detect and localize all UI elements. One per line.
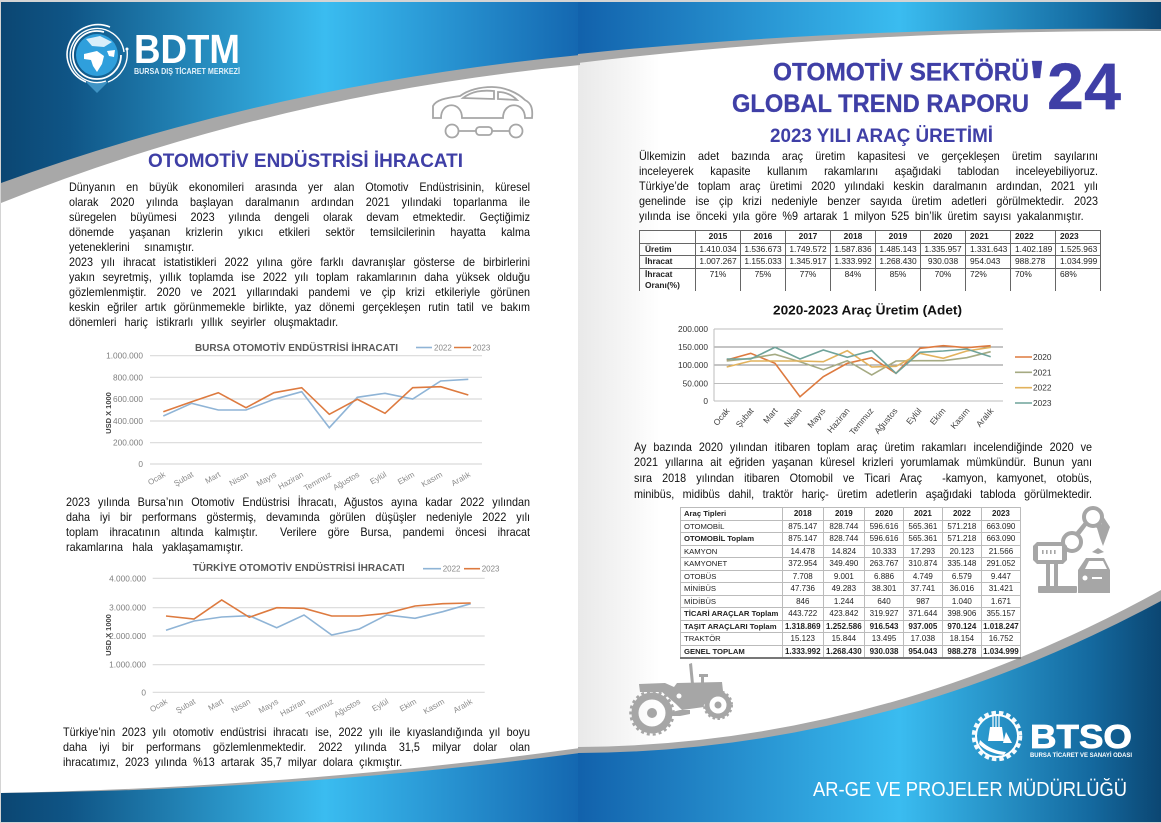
series 2021 bbox=[727, 352, 991, 375]
table: production and exports 2015-2023: 1.525.963 bbox=[1060, 244, 1097, 254]
table: production and exports 2015-2023: 70% bbox=[935, 268, 951, 278]
x axis labels: Ekim bbox=[398, 697, 418, 714]
chart legend: 2022 bbox=[434, 344, 452, 352]
table: vehicle types 2018-2023: 49.283 bbox=[832, 584, 856, 593]
x axis labels: Mart bbox=[761, 405, 780, 425]
table: vehicle types 2018-2023: GENEL TOPLAM bbox=[684, 646, 745, 656]
table: vehicle types 2018-2023: 20.123 bbox=[950, 546, 974, 556]
series 2023 bbox=[163, 387, 468, 414]
chart legend: 2023 bbox=[472, 344, 491, 352]
y axis title: USD X 1000 bbox=[104, 614, 113, 656]
table: vehicle types 2018-2023: 930.038 bbox=[870, 646, 898, 656]
table: production and exports 2015-2023: 2022 bbox=[1015, 231, 1034, 241]
x axis labels: Aralık bbox=[450, 469, 473, 488]
table: vehicle types 2018-2023: 1.018.247 bbox=[983, 622, 1019, 630]
table: vehicle types 2018-2023: MİNİBÜS bbox=[684, 584, 716, 593]
series 2022 bbox=[727, 347, 991, 367]
table: vehicle types 2018-2023: 1.268.430 bbox=[826, 646, 862, 656]
x axis labels: Eylül bbox=[370, 697, 390, 713]
y axis labels bbox=[109, 573, 146, 697]
chart legend: 2023 bbox=[1033, 398, 1052, 408]
x axis labels: Nisan bbox=[228, 470, 250, 488]
table: production and exports 2015-2023: 77% bbox=[800, 268, 816, 278]
table: vehicle types 2018-2023: 2021 bbox=[914, 509, 932, 518]
table: production and exports 2015-2023: 1.536.673 bbox=[744, 244, 782, 254]
table: vehicle types 2018-2023: 398.906 bbox=[947, 609, 976, 618]
y axis title: USD X 1000 bbox=[104, 392, 113, 434]
text block: intro paragraphs: dönemde yaşanan krizlerin yıkıcı etkileri sektör temsilcilerinin hayatta kalma bbox=[69, 224, 530, 238]
icon: gear emblem bbox=[974, 712, 1020, 760]
chart legend: 2022 bbox=[1033, 383, 1052, 393]
text block: intro paragraphs: Dünyanın en büyük ekonomileri arasında yer alan Otomotiv Endüstrisinin, küresel bbox=[69, 180, 530, 194]
text block: monthly commentary: 2021 yıllarına ait eğriden yaşanan küresel krizleri yorumlamak mümkündür. Bunun yanı bbox=[634, 455, 1092, 469]
table: production and exports 2015-2023: 2019 bbox=[889, 231, 907, 241]
table: production and exports 2015-2023: 1.485.143 bbox=[879, 244, 917, 254]
x axis labels: Nisan bbox=[782, 406, 804, 429]
table: vehicle types 2018-2023: 1.671 bbox=[991, 596, 1011, 606]
x axis labels: Kasım bbox=[422, 697, 446, 716]
table: vehicle types 2018-2023: 2020 bbox=[875, 509, 893, 518]
text block: intro paragraphs: 2023 yılı ihracat istatistikleri 2022 yılına göre farklı davranışlar gösterse de birbirlerini bbox=[69, 254, 530, 268]
table: vehicle types 2018-2023: 937.005 bbox=[908, 622, 937, 630]
logo wordmark: BDTM bbox=[134, 26, 240, 72]
table: vehicle types 2018-2023: KAMYONET bbox=[684, 559, 727, 568]
x axis labels: Şubat bbox=[172, 470, 196, 488]
table: vehicle types 2018-2023: 335.148 bbox=[947, 559, 976, 568]
x axis labels: Temmuz bbox=[847, 406, 876, 437]
text block: production intro: genelinde ise çip krizi nedeniyle benzer sayıda üretim adetleri görülmektedir. 2023 bbox=[639, 194, 1098, 208]
y axis labels: 2.000.000 bbox=[109, 631, 146, 641]
table: production and exports 2015-2023: 2018 bbox=[844, 231, 862, 241]
table: production and exports 2015-2023: 71% bbox=[710, 268, 726, 278]
text block: intro paragraphs bbox=[69, 180, 530, 328]
table: vehicle types 2018-2023: 663.090 bbox=[986, 522, 1015, 530]
table: vehicle types 2018-2023: TAŞIT ARAÇLARI Toplam bbox=[684, 622, 777, 630]
chart legend: 2020 bbox=[1033, 352, 1052, 362]
table: vehicle types 2018-2023: 954.043 bbox=[908, 646, 937, 656]
table: vehicle types 2018-2023: 828.744 bbox=[829, 534, 858, 543]
text block: production intro: inceleyerek kapasite kullanım rakamlarını aşağıdaki tablodan inceleyebiliyoruz. bbox=[639, 164, 1098, 178]
x axis labels: Mayıs bbox=[255, 470, 278, 488]
table: vehicle types 2018-2023: 47.736 bbox=[791, 584, 815, 593]
table: production and exports 2015-2023: 1.331.643 bbox=[970, 244, 1007, 254]
x axis labels: Ocak bbox=[711, 405, 732, 427]
series 2022 bbox=[163, 379, 468, 428]
text block: production intro bbox=[639, 148, 1098, 222]
logo subtitle: BURSA DIŞ TİCARET MERKEZİ bbox=[134, 66, 240, 76]
table: production and exports 2015-2023: 1.268.430 bbox=[879, 256, 917, 266]
text block: intro paragraphs: keskin eğriler artık görünmemekle birlikte, yaz dönemi gerçekleşen rutin tatil ve bakım bbox=[69, 300, 530, 314]
x axis labels: Ekim bbox=[396, 470, 416, 487]
text block: intro paragraphs: süregelen büyümesi 2023 yılında dengeli olarak devam etmektedir. Geçtiğimiz bbox=[69, 210, 530, 224]
table: vehicle types 2018-2023: 319.927 bbox=[870, 609, 898, 618]
text block: production intro: Türkiye’de toplam araç üretimi 2020 yılındaki keskin daralmanın ardından, 2021 yılı bbox=[639, 178, 1098, 192]
x axis labels: Şubat bbox=[174, 697, 198, 715]
table: vehicle types 2018-2023: 1.333.992 bbox=[785, 646, 821, 656]
chart title: BURSA OTOMOTİV ENDÜSTRİSİ İHRACATI bbox=[195, 341, 398, 354]
table: production and exports 2015-2023: 85% bbox=[890, 268, 906, 278]
heading: report title: 24 bbox=[1047, 49, 1121, 123]
x axis labels: Ağustos bbox=[331, 470, 361, 492]
table: vehicle types 2018-2023: 10.333 bbox=[872, 546, 896, 556]
y axis labels: 200.000 bbox=[678, 324, 708, 334]
table: vehicle types 2018-2023: 17.293 bbox=[911, 546, 935, 556]
chart title: TÜRKİYE OTOMOTİV ENDÜSTRİSİ İHRACATI bbox=[193, 561, 405, 574]
table: vehicle types 2018-2023: 291.052 bbox=[986, 559, 1015, 568]
y axis labels bbox=[106, 351, 143, 469]
y axis labels: 1.000.000 bbox=[109, 660, 146, 670]
table: production and exports 2015-2023: 1.007.267 bbox=[699, 256, 737, 266]
table: vehicle types 2018-2023: 571.218 bbox=[947, 522, 976, 530]
table: vehicle types 2018-2023: 2023 bbox=[992, 509, 1010, 518]
table: production and exports 2015-2023 bbox=[639, 230, 1101, 290]
table: vehicle types 2018-2023: 987 bbox=[916, 596, 930, 606]
y axis labels: 50.000 bbox=[683, 378, 708, 388]
table: production and exports 2015-2023: İhracat bbox=[645, 256, 672, 266]
text block: Turkey commentary: ihracatımız, 2023 yılında %13 artarak 35,7 milyar dolara çıkmıştır. bbox=[63, 754, 402, 768]
y axis labels: 400.000 bbox=[113, 416, 143, 426]
y axis labels: 4.000.000 bbox=[109, 573, 146, 583]
table: vehicle types 2018-2023: 14.824 bbox=[832, 546, 856, 556]
y axis labels: 0 bbox=[138, 459, 143, 469]
x axis labels: Şubat bbox=[734, 405, 756, 429]
chart legend: 2022 bbox=[443, 565, 461, 574]
table: production and exports 2015-2023: Üretim bbox=[645, 244, 672, 254]
table: vehicle types 2018-2023: 7.708 bbox=[793, 572, 813, 580]
table: vehicle types 2018-2023: 640 bbox=[877, 596, 891, 606]
x axis labels: Haziran bbox=[825, 406, 852, 435]
table: vehicle types 2018-2023: 37.741 bbox=[911, 584, 935, 593]
series 2020 bbox=[727, 346, 991, 397]
table: production and exports 2015-2023: 72% bbox=[970, 268, 987, 278]
table: production and exports 2015-2023: 84% bbox=[845, 268, 861, 278]
table: vehicle types 2018-2023: OTOMOBİL Toplam bbox=[684, 534, 754, 543]
x axis labels: Eylül bbox=[904, 406, 924, 426]
y axis labels: 800.000 bbox=[113, 372, 143, 382]
table: vehicle types 2018-2023: 38.301 bbox=[872, 584, 896, 593]
y axis labels: 0 bbox=[141, 687, 146, 697]
table: vehicle types 2018-2023: 15.123 bbox=[791, 634, 815, 643]
y axis labels: 1.000.000 bbox=[106, 351, 143, 361]
table: vehicle types 2018-2023: 596.616 bbox=[870, 534, 898, 543]
text block: Turkey commentary: Türkiye’nin 2023 yılı otomotiv endüstrisi ihracatı ise, 2022 yılı ile kıyaslandığında yıl boyu bbox=[63, 724, 530, 738]
table: vehicle types 2018-2023: 1.040 bbox=[952, 596, 972, 606]
table: production and exports 2015-2023: 1.587.836 bbox=[834, 244, 872, 254]
text block: Bursa commentary: daha iyi bir performans göstermiş, devamında görülen düşüşler nedeniyle 2022 yılı bbox=[66, 510, 530, 524]
series 2023 bbox=[166, 600, 471, 619]
table: vehicle types 2018-2023: 371.644 bbox=[908, 609, 937, 618]
table: vehicle types 2018-2023: 1.252.586 bbox=[826, 622, 862, 630]
table: production and exports 2015-2023: 2017 bbox=[799, 231, 817, 241]
text block: intro paragraphs: dönemleri hariç istikrarlı yıllık seyirler oluşmaktadır. bbox=[69, 314, 338, 328]
text block: Bursa commentary: toplam ihracatının altında kalmıştır. Verilere göre Bursa, pandemi öncesi ihracat bbox=[66, 524, 530, 538]
table: production and exports 2015-2023: 2020 bbox=[934, 231, 952, 241]
series 2023 bbox=[727, 347, 991, 373]
table: production and exports 2015-2023: 2023 bbox=[1060, 231, 1079, 241]
table: vehicle types 2018-2023: 6.886 bbox=[874, 572, 894, 580]
table: vehicle types 2018-2023: 846 bbox=[796, 596, 809, 606]
table: vehicle types 2018-2023: 596.616 bbox=[870, 522, 898, 530]
table: vehicle types 2018-2023: 6.579 bbox=[952, 572, 972, 580]
x axis labels: Eylül bbox=[368, 470, 388, 486]
x axis labels bbox=[148, 696, 475, 720]
table: vehicle types 2018-2023: 1.034.999 bbox=[983, 646, 1019, 656]
footer: department name: AR-GE VE PROJELER MÜDÜRLÜĞÜ bbox=[813, 778, 1127, 801]
table: production and exports 2015-2023: 1.335.957 bbox=[924, 244, 962, 254]
table: vehicle types 2018-2023: 828.744 bbox=[829, 522, 858, 530]
text block: Turkey commentary: daha iyi bir performans gözlemlenmektedir. 2022 yılında 31,5 milyar dolar olan bbox=[63, 740, 530, 754]
table: vehicle types 2018-2023: 2018 bbox=[794, 509, 812, 518]
table: vehicle types 2018-2023: 970.124 bbox=[947, 622, 976, 630]
heading: vehicle production: 2023 YILI ARAÇ ÜRETİMİ bbox=[770, 126, 993, 147]
logo wordmark: BTSO bbox=[1030, 718, 1132, 755]
table: production and exports 2015-2023: 2015 bbox=[709, 231, 727, 241]
table: production and exports 2015-2023: 75% bbox=[755, 268, 771, 278]
table: vehicle types 2018-2023: 17.038 bbox=[911, 634, 935, 643]
x axis labels: Aralık bbox=[974, 405, 996, 429]
table: vehicle types 2018-2023: 349.490 bbox=[829, 559, 858, 568]
table: vehicle types 2018-2023: 16.752 bbox=[989, 634, 1013, 643]
table: production and exports 2015-2023: 1.345.917 bbox=[789, 256, 827, 266]
text block: intro paragraphs: gözlemlenmiştir. 2020 ve 2021 yıllarındaki pandemi ve çip krizi etkileriyle görünen bbox=[69, 284, 530, 298]
x axis labels: Temmuz bbox=[304, 697, 335, 720]
y axis labels: 600.000 bbox=[113, 394, 143, 404]
table: vehicle types 2018-2023: TRAKTÖR bbox=[684, 634, 721, 643]
text block: production intro: Ülkemizin adet bazında araç üretim kapasitesi ve gerçekleşen üretim sayılarını bbox=[639, 148, 1098, 162]
table: vehicle types 2018-2023: 14.478 bbox=[791, 546, 815, 556]
x axis labels: Mart bbox=[207, 697, 226, 713]
table: production and exports 2015-2023: 1.034.999 bbox=[1060, 256, 1097, 266]
x axis labels: Ocak bbox=[148, 696, 170, 714]
table: vehicle types 2018-2023: 18.154 bbox=[950, 634, 974, 643]
table: vehicle types 2018-2023: 1.318.869 bbox=[785, 622, 821, 630]
x axis labels: Temmuz bbox=[302, 470, 333, 493]
table: vehicle types 2018-2023: 875.147 bbox=[788, 534, 817, 543]
icon: globe pin bbox=[67, 25, 128, 93]
table: vehicle types 2018-2023: 875.147 bbox=[788, 522, 817, 530]
series 2022 bbox=[166, 604, 471, 635]
x axis labels: Ağustos bbox=[332, 697, 362, 719]
text block: monthly commentary bbox=[634, 440, 1092, 501]
chart legend: 2023 bbox=[482, 565, 500, 574]
table: vehicle types 2018-2023: 310.874 bbox=[908, 559, 937, 568]
x axis labels bbox=[146, 469, 473, 493]
table: vehicle types 2018-2023: 663.090 bbox=[986, 534, 1015, 543]
table: vehicle types 2018-2023: 15.844 bbox=[832, 634, 856, 643]
table: production and exports 2015-2023: 954.043 bbox=[970, 256, 1000, 266]
table: vehicle types 2018-2023: 9.447 bbox=[991, 572, 1011, 580]
table: production and exports 2015-2023: 70% bbox=[1015, 268, 1032, 278]
y axis labels: 0 bbox=[703, 396, 708, 406]
heading: report title: GLOBAL TREND RAPORU bbox=[732, 90, 1029, 118]
text block: intro paragraphs: olarak 2020 yılında başlayan daralmanın ardından 2021 yılındaki toparlanma ile bbox=[69, 194, 530, 208]
y axis labels bbox=[678, 324, 708, 406]
text block: intro paragraphs: yakın seyretmiş, yıllık toplamda ise 2022 yılı toplam rakamlarının daha yüksek olduğu bbox=[69, 270, 530, 284]
chart legend bbox=[1015, 352, 1052, 408]
table: production and exports 2015-2023: 1.410.034 bbox=[699, 244, 737, 254]
x axis labels: Ağustos bbox=[872, 406, 900, 436]
table: vehicle types 2018-2023: 916.543 bbox=[870, 622, 898, 630]
table: vehicle types 2018-2023: 565.361 bbox=[908, 522, 937, 530]
table: production and exports 2015-2023: 2021 bbox=[970, 231, 989, 241]
table: vehicle types 2018-2023: 2019 bbox=[835, 509, 853, 518]
table: production and exports 2015-2023: 1.155.033 bbox=[744, 256, 782, 266]
x axis labels: Haziran bbox=[279, 697, 307, 719]
table: vehicle types 2018-2023: 36.016 bbox=[950, 584, 974, 593]
table: vehicle types 2018-2023: 355.157 bbox=[986, 609, 1015, 618]
table: vehicle types 2018-2023: Araç Tipleri bbox=[684, 509, 726, 518]
table: production and exports 2015-2023: 1.333.992 bbox=[834, 256, 872, 266]
x axis labels: Kasım bbox=[948, 406, 972, 431]
table: production and exports 2015-2023: 1.749.572 bbox=[789, 244, 827, 254]
table: vehicle types 2018-2023: MİDİBÜS bbox=[684, 596, 716, 606]
x axis labels: Haziran bbox=[277, 470, 305, 492]
text block: Bursa commentary: rakamlarına hala yaklaşamamıştır. bbox=[66, 540, 243, 554]
x axis labels: Aralık bbox=[452, 696, 475, 715]
x axis labels: Kasım bbox=[420, 470, 444, 489]
table: vehicle types 2018-2023: KAMYON bbox=[684, 546, 717, 556]
text block: monthly commentary: minibüs, midibüs dahil, traktör hariç- üretim adetlerin aşağıdaki tabloda görülmektedir. bbox=[634, 487, 1092, 501]
table: production and exports 2015-2023: 930.038 bbox=[928, 256, 958, 266]
table: vehicle types 2018-2023: 372.954 bbox=[788, 559, 817, 568]
table: vehicle types 2018-2023: OTOBÜS bbox=[684, 572, 716, 580]
table: vehicle types 2018-2023: 13.495 bbox=[872, 634, 896, 643]
y axis labels: 3.000.000 bbox=[109, 603, 146, 613]
table: vehicle types 2018-2023: 988.278 bbox=[947, 646, 976, 656]
table: production and exports 2015-2023: 68% bbox=[1060, 268, 1077, 278]
chart legend bbox=[423, 565, 500, 574]
table: vehicle types 2018-2023: 565.361 bbox=[908, 534, 937, 543]
table: vehicle types 2018-2023: 9.001 bbox=[834, 572, 854, 580]
y axis labels: 200.000 bbox=[113, 438, 143, 448]
text block: Bursa commentary: 2023 yılında Bursa’nın Otomotiv Endüstrisi İhracatı, Ağustos ayına kadar 2022 yılından bbox=[66, 494, 530, 508]
table: vehicle types 2018-2023: 2022 bbox=[953, 509, 971, 518]
x axis labels: Mayıs bbox=[257, 697, 280, 715]
y axis labels: 100.000 bbox=[678, 360, 708, 370]
logo subtitle: BURSA TİCARET VE SANAYİ ODASI bbox=[1030, 751, 1132, 759]
chart title: 2020-2023 Araç Üretim (Adet) bbox=[773, 302, 962, 318]
table: vehicle types 2018-2023: 443.722 bbox=[788, 609, 817, 618]
table: vehicle types 2018-2023: 263.767 bbox=[870, 559, 898, 568]
table: vehicle types 2018-2023: 21.566 bbox=[989, 546, 1013, 556]
x axis labels: Ocak bbox=[146, 469, 168, 487]
table: production and exports 2015-2023: 988.278 bbox=[1015, 256, 1045, 266]
heading: left page title: OTOMOTİV ENDÜSTRİSİ İHRACATI bbox=[148, 151, 463, 172]
table: production and exports 2015-2023: İhracat Oranı(%) bbox=[645, 268, 680, 290]
table: vehicle types 2018-2023: TİCARİ ARAÇLAR Toplam bbox=[684, 609, 778, 618]
x axis labels: Ekim bbox=[928, 406, 948, 427]
text block: production intro: yılında ise önceki yıla göre %9 artarak 1 milyon 525 bin’lik üretim sayısı yakalanmıştır. bbox=[639, 208, 1084, 222]
text block: Turkey commentary bbox=[63, 724, 530, 768]
table: vehicle types 2018-2023: 571.218 bbox=[947, 534, 976, 543]
text block: intro paragraphs: yeteneklerini sınamıştır. bbox=[69, 240, 194, 254]
table: vehicle types 2018-2023: 1.244 bbox=[834, 596, 854, 606]
table: vehicle types 2018-2023 bbox=[680, 507, 1021, 659]
y axis labels: 150.000 bbox=[678, 342, 708, 352]
chart legend: 2021 bbox=[1033, 367, 1052, 377]
table: vehicle types 2018-2023: 4.749 bbox=[913, 572, 933, 580]
text block: monthly commentary: sıra 2018 yılından itibaren Otomobil ve Ticari Araç -kamyon, kamyonet, otobüs, bbox=[634, 471, 1092, 485]
text block: monthly commentary: Ay bazında 2020 yılından itibaren toplam araç üretim rakamları incelendiğinde 2020 ve bbox=[634, 440, 1092, 454]
x axis labels bbox=[711, 405, 996, 437]
text block: Bursa commentary bbox=[66, 494, 530, 554]
x axis labels: Mayıs bbox=[805, 406, 828, 430]
table: vehicle types 2018-2023: OTOMOBİL bbox=[684, 522, 724, 530]
x axis labels: Mart bbox=[204, 470, 223, 486]
x axis labels: Nisan bbox=[230, 697, 252, 715]
table: production and exports 2015-2023: 2016 bbox=[754, 231, 772, 241]
table: vehicle types 2018-2023: 31.421 bbox=[989, 584, 1013, 593]
table: production and exports 2015-2023: 1.402.189 bbox=[1015, 244, 1052, 254]
chart legend bbox=[416, 344, 491, 352]
table: vehicle types 2018-2023: 423.842 bbox=[829, 609, 858, 618]
heading: report title: OTOMOTİV SEKTÖRÜ bbox=[773, 58, 1029, 86]
